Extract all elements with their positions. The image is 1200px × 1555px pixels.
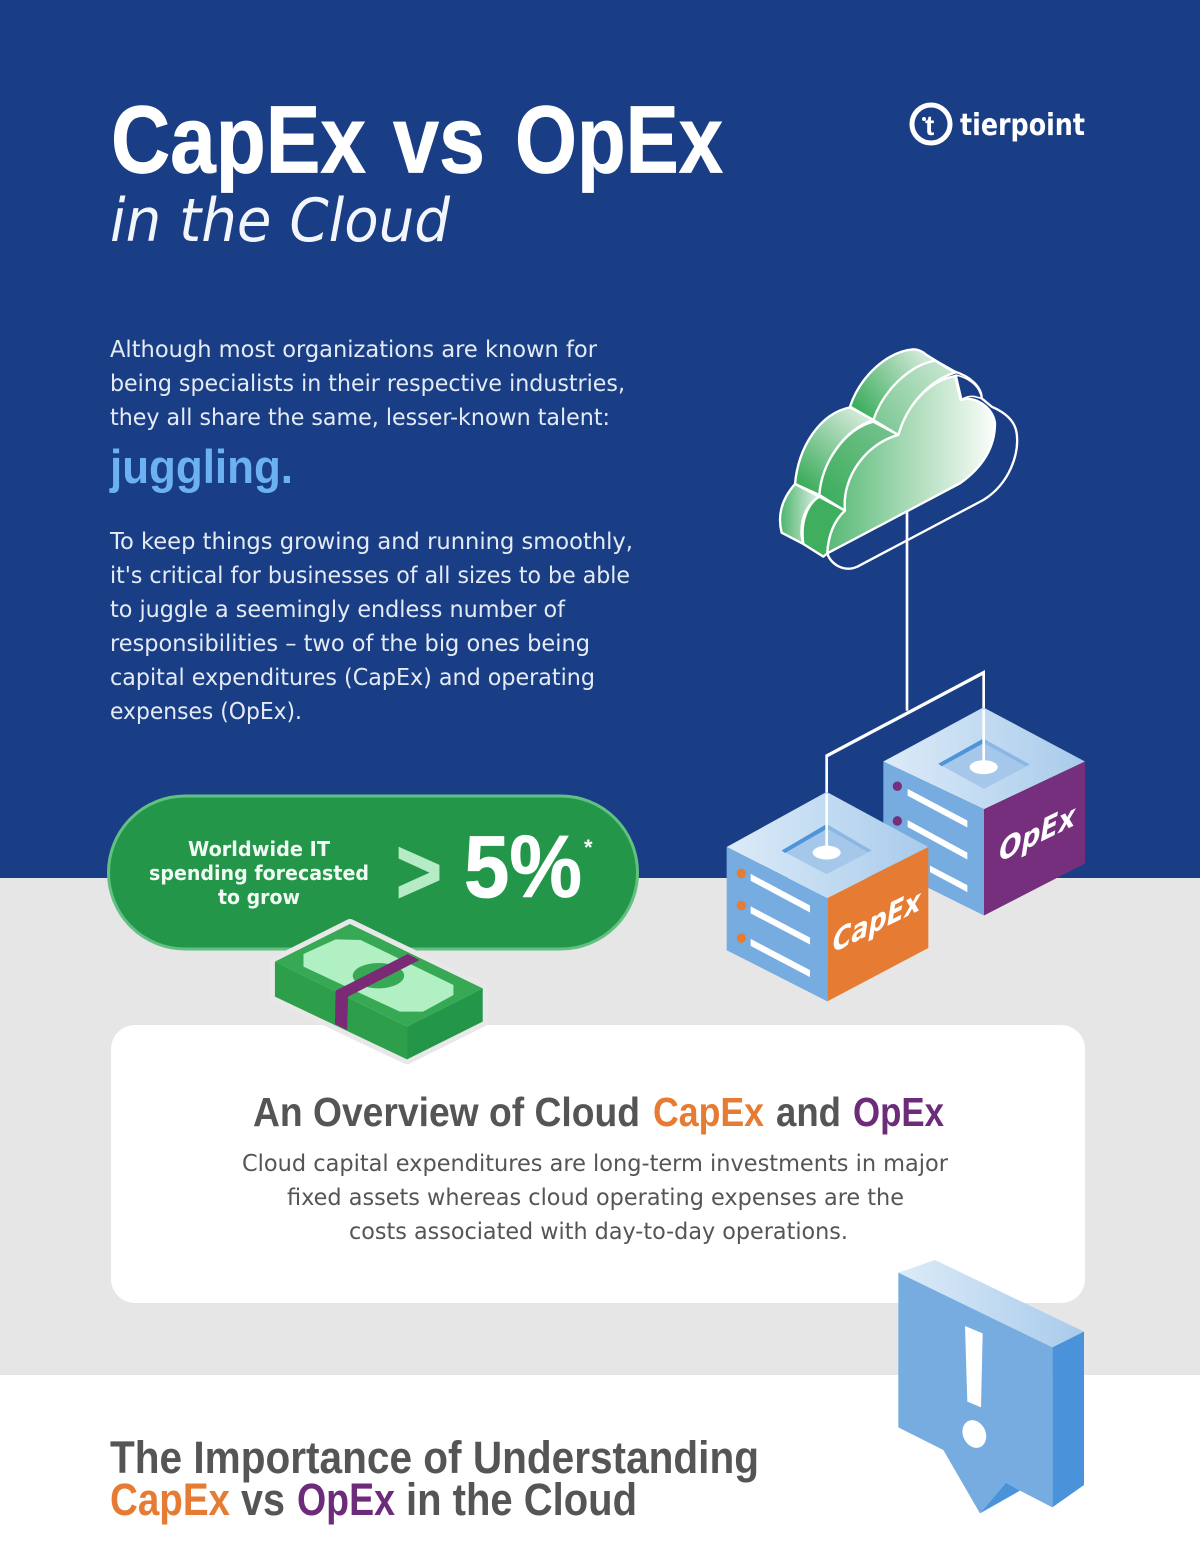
body paragraph: it's critical for businesses of all sizes to be able <box>110 563 630 589</box>
title line 1: CapEx <box>111 86 366 194</box>
overview text: fixed assets whereas cloud operating expenses are the <box>287 1185 904 1211</box>
bottom heading <box>110 1432 759 1525</box>
intro text <box>110 337 625 431</box>
overview heading <box>253 1089 944 1135</box>
callout label: spending forecasted <box>149 861 369 885</box>
intro text: they all share the same, lesser-known talent: <box>110 405 610 431</box>
callout label: to grow <box>218 885 300 909</box>
title <box>110 86 723 256</box>
title line 1: vs <box>393 86 485 194</box>
server label: OpEx: OpEx <box>999 798 1077 870</box>
title line 1: OpEx <box>515 86 723 194</box>
overview heading: and <box>776 1089 841 1135</box>
bottom heading: CapEx <box>110 1474 230 1525</box>
bottom heading: OpEx <box>297 1474 395 1525</box>
cloud front face <box>827 376 995 553</box>
percentage: 5% <box>464 817 582 916</box>
body paragraph: capital expenditures (CapEx) and operating <box>110 665 595 691</box>
background: blue band <box>0 0 1200 878</box>
body paragraph: responsibilities – two of the big ones being <box>110 631 590 657</box>
intro text: being specialists in their respective industries, <box>110 371 625 397</box>
body paragraph: to juggle a seemingly endless number of <box>110 597 566 623</box>
overview text <box>242 1151 949 1245</box>
server label: CapEx: CapEx <box>833 883 922 960</box>
icon: alert speech bubble <box>898 1260 1084 1513</box>
body paragraph: expenses (OpEx). <box>110 699 302 725</box>
body paragraph: To keep things growing and running smoothly, <box>109 529 633 555</box>
server: OpEx <box>883 707 1085 915</box>
greater-than sign: > <box>396 821 442 923</box>
logo: tierpoint: tierpoint <box>960 108 1085 143</box>
callout label <box>149 837 369 909</box>
connector lines <box>827 512 984 844</box>
illustration: cloud <box>780 349 1017 569</box>
overview heading: OpEx <box>853 1089 944 1135</box>
overview text: Cloud capital expenditures are long-term investments in major <box>242 1151 949 1177</box>
cloud middle lobe <box>795 407 873 495</box>
background: white band <box>0 1375 1200 1555</box>
cloud lower lobe <box>780 484 819 544</box>
icon: money stack <box>275 924 483 1059</box>
bottom heading: vs <box>241 1474 285 1525</box>
callout label: Worldwide IT <box>188 837 330 861</box>
footnote asterisk: * <box>584 835 593 860</box>
intro text: Although most organizations are known for <box>110 337 598 363</box>
callout pill: IT spending forecast <box>108 796 638 949</box>
overview text: costs associated with day-to-day operations. <box>349 1219 848 1245</box>
highlight word: juggling: juggling. <box>109 440 293 493</box>
cloud notch <box>956 375 982 399</box>
white overview card <box>111 1025 1085 1303</box>
title line 1 <box>111 86 723 194</box>
server: CapEx <box>727 792 928 1001</box>
title line 2: in the Cloud <box>110 186 451 256</box>
bottom heading: The Importance of Understanding <box>110 1432 759 1483</box>
body paragraph <box>109 529 633 725</box>
bottom heading: in the Cloud <box>406 1474 637 1525</box>
overview heading: An Overview of Cloud <box>253 1089 640 1135</box>
cloud top lobe <box>850 349 955 420</box>
background: gray band <box>0 878 1200 1375</box>
logo: tierpoint: t <box>925 110 934 141</box>
overview heading: CapEx <box>653 1089 764 1135</box>
illustration: connectors and servers <box>727 512 1085 1001</box>
cloud rear outline <box>827 350 1017 569</box>
logo: tierpoint <box>912 105 1085 143</box>
